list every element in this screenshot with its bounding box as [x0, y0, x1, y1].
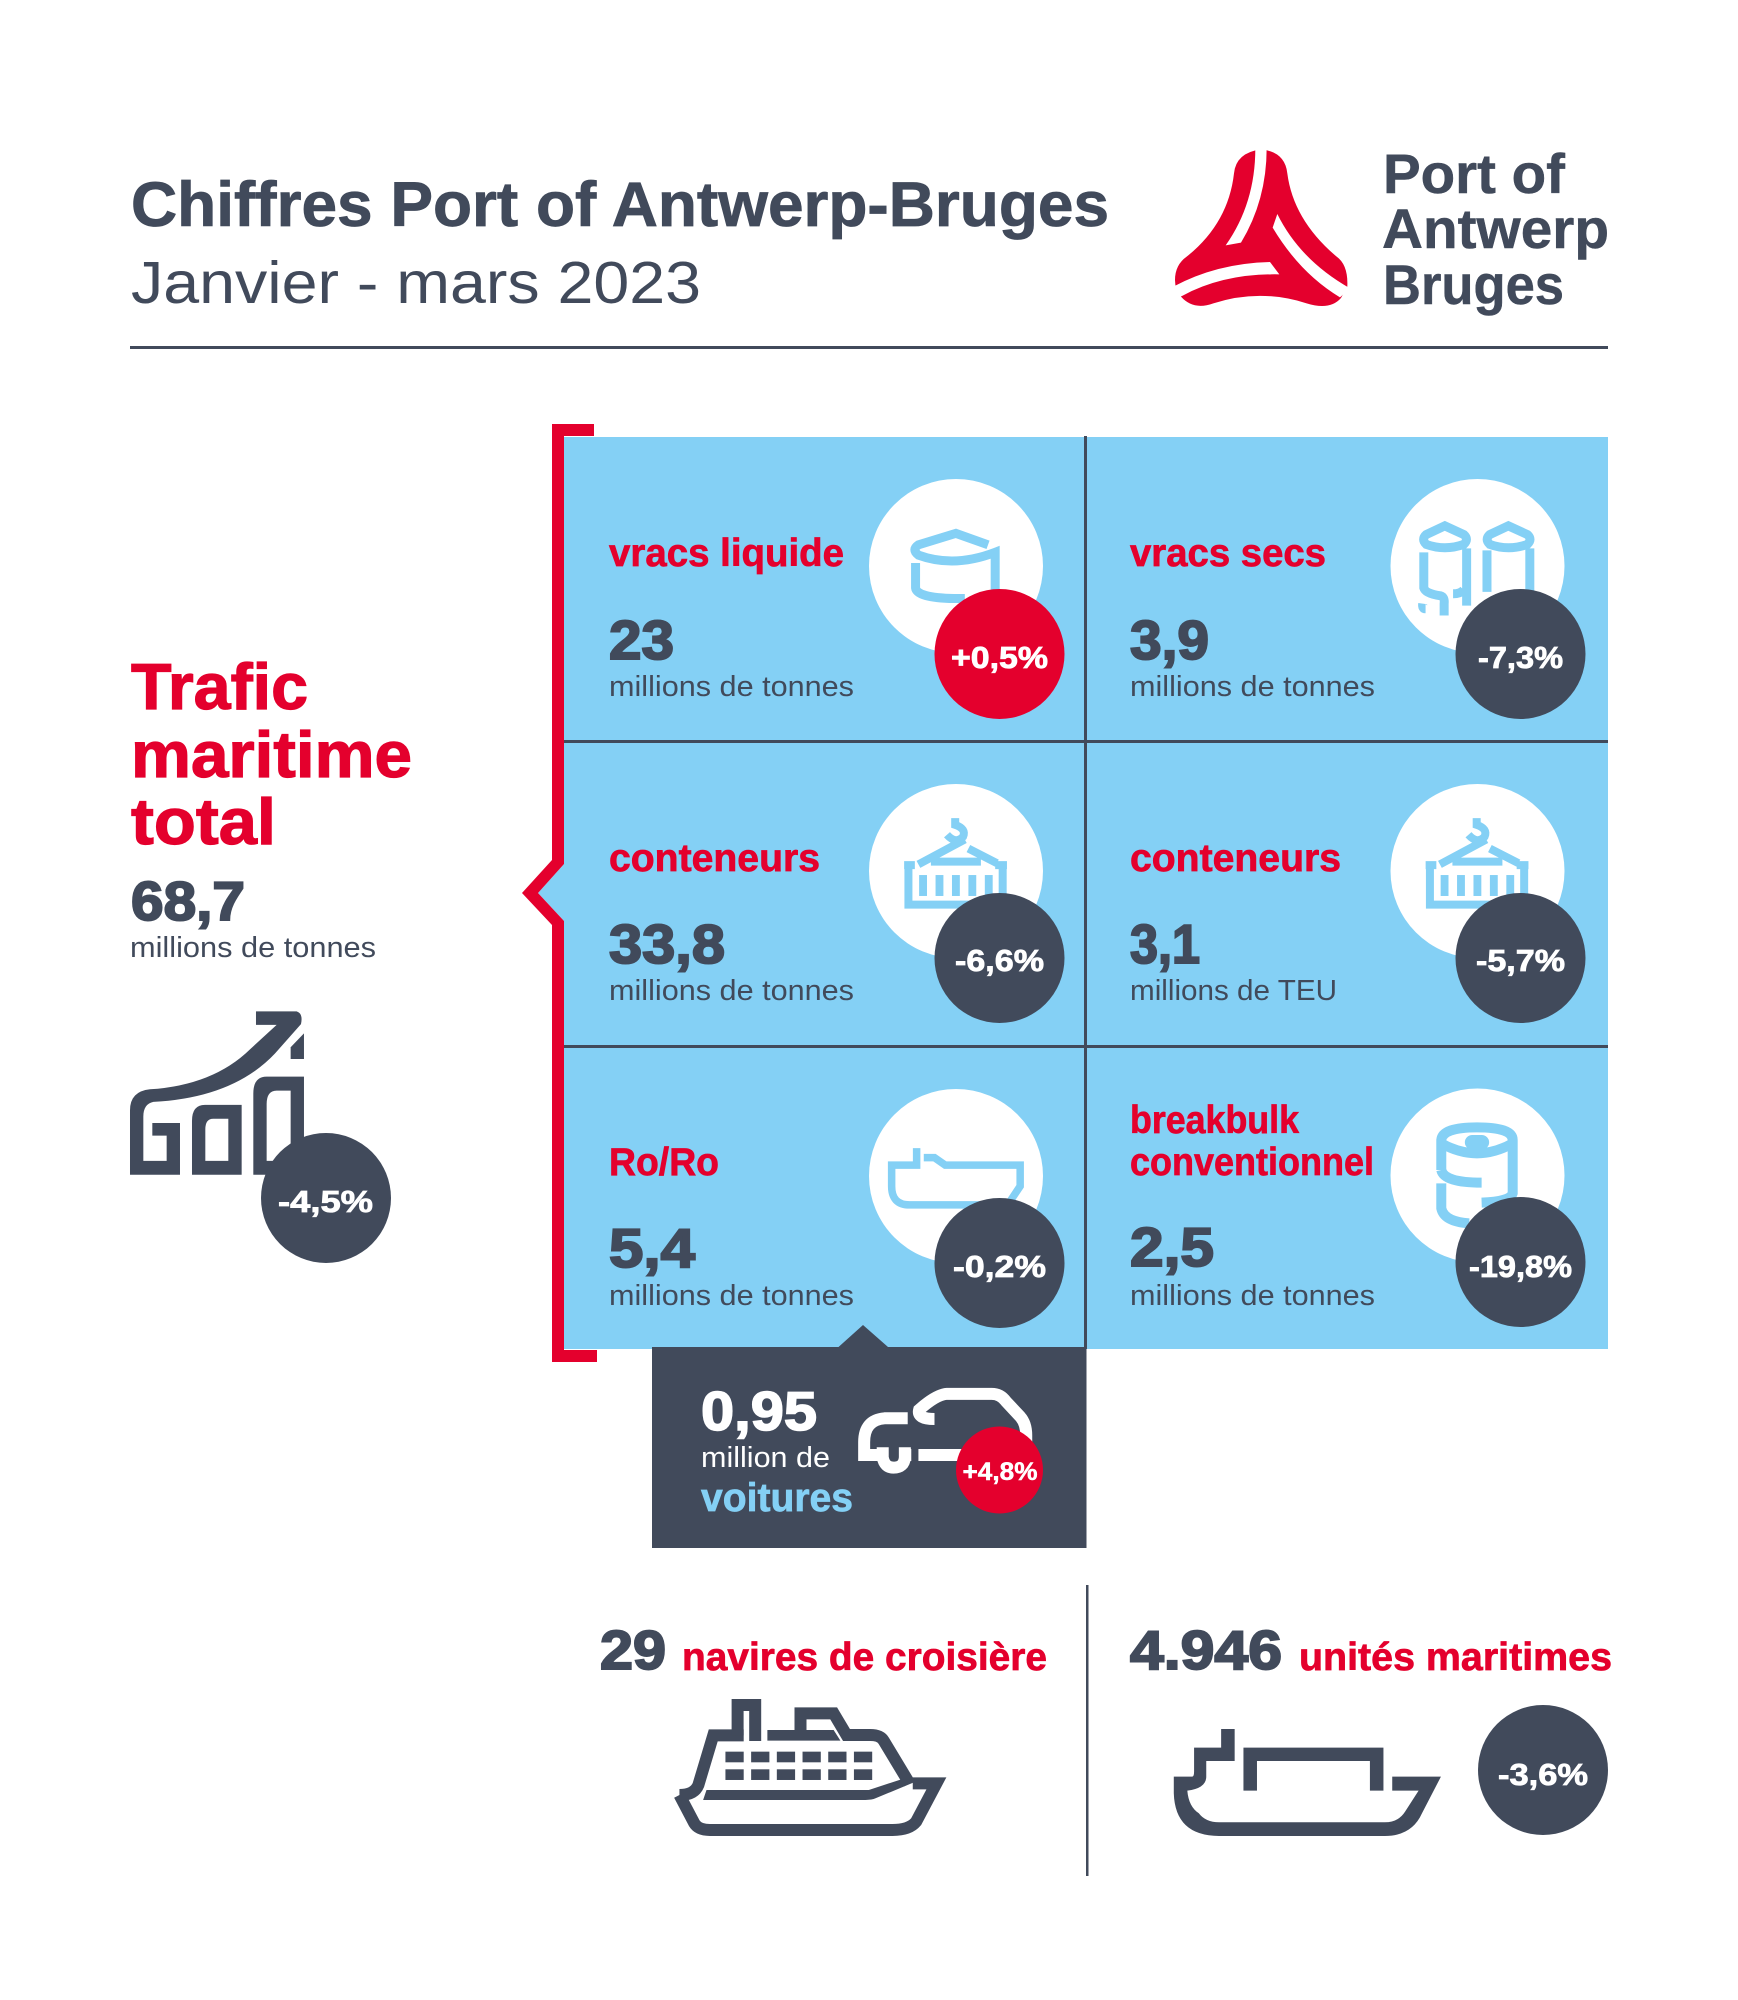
badge	[1456, 589, 1586, 719]
logo wordmark	[1382, 142, 1609, 316]
logo mark	[1173, 148, 1350, 306]
unit: million de	[701, 1442, 830, 1474]
icon: silos	[1390, 479, 1564, 653]
cell: vracs liquide	[609, 479, 1064, 719]
panel: maritime units	[1130, 1619, 1612, 1836]
icon: container	[1390, 784, 1564, 958]
value: 5,4	[609, 1217, 695, 1279]
label: voitures	[701, 1476, 853, 1520]
icon: cruise ship	[679, 1705, 936, 1830]
label: Ro/Ro	[609, 1141, 719, 1184]
badge: total change	[261, 1133, 391, 1263]
heading: trafic maritime total: maritime	[131, 718, 412, 791]
badge	[1456, 893, 1586, 1023]
badge: -6,6%	[955, 943, 1044, 978]
label	[1130, 1099, 1374, 1184]
callout box with pointer	[652, 1325, 1086, 1548]
value: 33,8	[609, 913, 725, 975]
heading: trafic maritime total: total	[131, 785, 276, 858]
heading: trafic maritime total: Trafic	[131, 650, 308, 723]
badge: +4,8%	[962, 1458, 1038, 1486]
panel: cruise ships	[600, 1619, 1047, 1830]
unit: millions de tonnes	[609, 1280, 854, 1312]
cell: conteneurs TEU	[1130, 784, 1586, 1023]
value: 3,9	[1130, 609, 1209, 671]
label: vracs liquide	[609, 532, 844, 575]
unit: millions de tonnes	[1130, 671, 1375, 703]
total unit: millions de tonnes	[130, 932, 376, 964]
panel: total maritime traffic	[130, 650, 412, 1263]
icon: car	[864, 1394, 1026, 1468]
badge: total change: -4,5%	[278, 1184, 373, 1219]
badge	[956, 1426, 1043, 1514]
badge	[934, 1198, 1064, 1328]
icon: container	[869, 784, 1043, 958]
icon: steel coil	[1390, 1088, 1564, 1262]
value: 23	[609, 609, 674, 671]
title: Chiffres Port of Antwerp-Bruges	[131, 170, 1109, 240]
value: 3,1	[1130, 913, 1200, 975]
cell: Ro/Ro	[609, 1089, 1064, 1328]
badge	[934, 893, 1064, 1023]
badge: -3,6%	[1498, 1757, 1588, 1792]
badge	[1456, 1197, 1586, 1327]
value: 2,5	[1130, 1216, 1214, 1278]
bracket	[522, 424, 597, 1362]
logo wordmark: Port of	[1383, 142, 1565, 205]
unit: millions de TEU	[1130, 975, 1337, 1007]
badge	[1478, 1705, 1608, 1835]
label: breakbulk	[1130, 1099, 1299, 1142]
badge: +0,5%	[951, 640, 1048, 675]
icon: liquid tank	[869, 479, 1043, 653]
value: 4.946	[1130, 1619, 1282, 1681]
cell: breakbulk conventionnel	[1130, 1088, 1586, 1327]
subtitle: Janvier - mars 2023	[131, 250, 701, 316]
label: conteneurs	[1130, 837, 1341, 880]
label: conteneurs	[609, 837, 820, 880]
badge: -19,8%	[1469, 1249, 1572, 1284]
unit: millions de tonnes	[1130, 1280, 1375, 1312]
icon: ro/ro ship	[869, 1089, 1043, 1263]
badge: -7,3%	[1478, 640, 1563, 675]
label: navires de croisière	[682, 1636, 1047, 1679]
value: 0,95	[701, 1380, 817, 1442]
unit: millions de tonnes	[609, 671, 854, 703]
logo	[1173, 142, 1609, 316]
badge: -0,2%	[953, 1249, 1046, 1284]
total value: 68,7	[131, 870, 245, 932]
label: vracs secs	[1130, 532, 1326, 575]
icon: barge	[1174, 1729, 1441, 1836]
label: conventionnel	[1130, 1141, 1374, 1184]
icon: growth chart	[130, 1011, 304, 1175]
badge: -5,7%	[1476, 943, 1565, 978]
grid background	[564, 437, 1608, 1349]
logo wordmark: Antwerp	[1382, 197, 1609, 260]
label: unités maritimes	[1299, 1636, 1612, 1679]
cell: vracs secs	[1130, 479, 1586, 719]
callout: voitures	[652, 1325, 1086, 1548]
value: 29	[600, 1619, 666, 1681]
panel: cargo grid	[564, 436, 1608, 1349]
header	[131, 142, 1609, 316]
unit: millions de tonnes	[609, 975, 854, 1007]
heading: trafic maritime total	[131, 650, 412, 858]
badge	[934, 589, 1064, 719]
logo wordmark: Bruges	[1383, 253, 1564, 316]
cell: conteneurs tonnes	[609, 784, 1064, 1023]
